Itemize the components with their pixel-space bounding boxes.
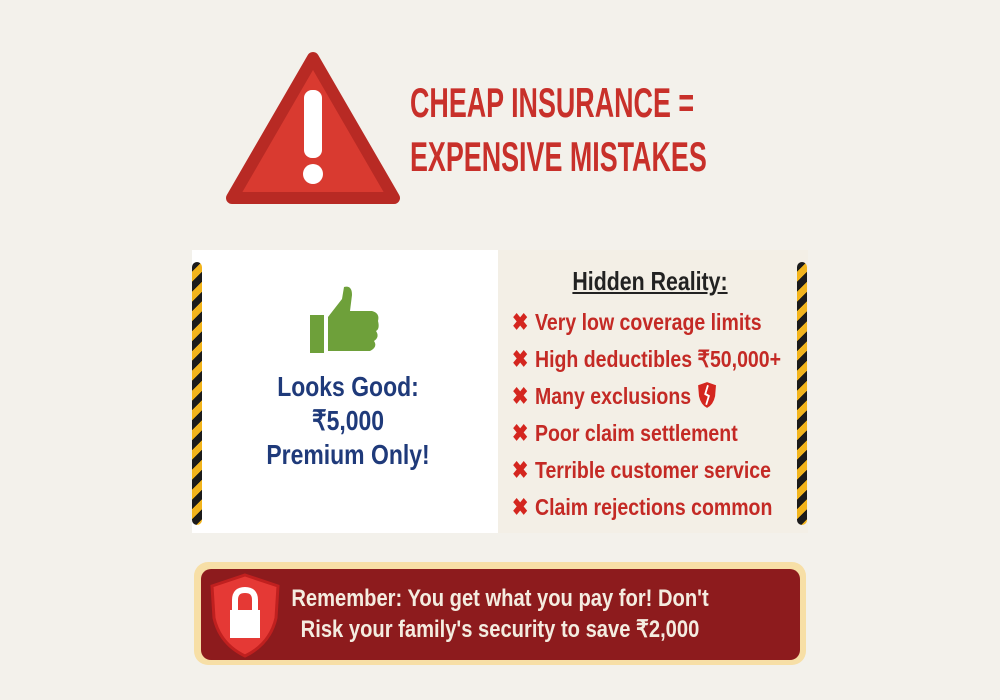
icon: shield lock [210,574,280,658]
panel: looks good [192,250,498,533]
text: looks good: Looks Good: [277,371,419,402]
right hazard stripe [797,262,807,525]
list: hidden reality items: ✖ High deductibles ₹50,000+ [512,346,781,372]
panel: hidden reality [498,250,808,533]
icon: thumbs up [310,286,379,353]
banner text: Risk your family's security to save ₹2,000 [301,616,699,643]
heading: hidden reality: Hidden Reality: [572,266,728,296]
list: hidden reality items: ✖ Many exclusions [512,383,691,409]
text: looks good: Premium Only! [266,439,430,470]
banner: remember [194,562,806,665]
banner text: Remember: You get what you pay for! Don't [291,585,709,612]
list: hidden reality items: ✖ Very low coverage limits [512,309,762,335]
list: hidden reality items [512,309,781,520]
list: hidden reality items: ✖ Terrible customer service [512,457,771,483]
list: hidden reality items: ✖ Poor claim settlement [512,420,738,446]
banner text [291,585,709,643]
icon: warning triangle [226,52,400,204]
title: CHEAP INSURANCE = [410,79,694,126]
title: EXPENSIVE MISTAKES [410,133,707,180]
text: looks good [266,371,430,470]
text: looks good: ₹5,000 [312,405,384,436]
list: hidden reality items: ✖ Claim rejections common [512,494,772,520]
title [410,79,707,180]
left hazard stripe [192,262,202,525]
